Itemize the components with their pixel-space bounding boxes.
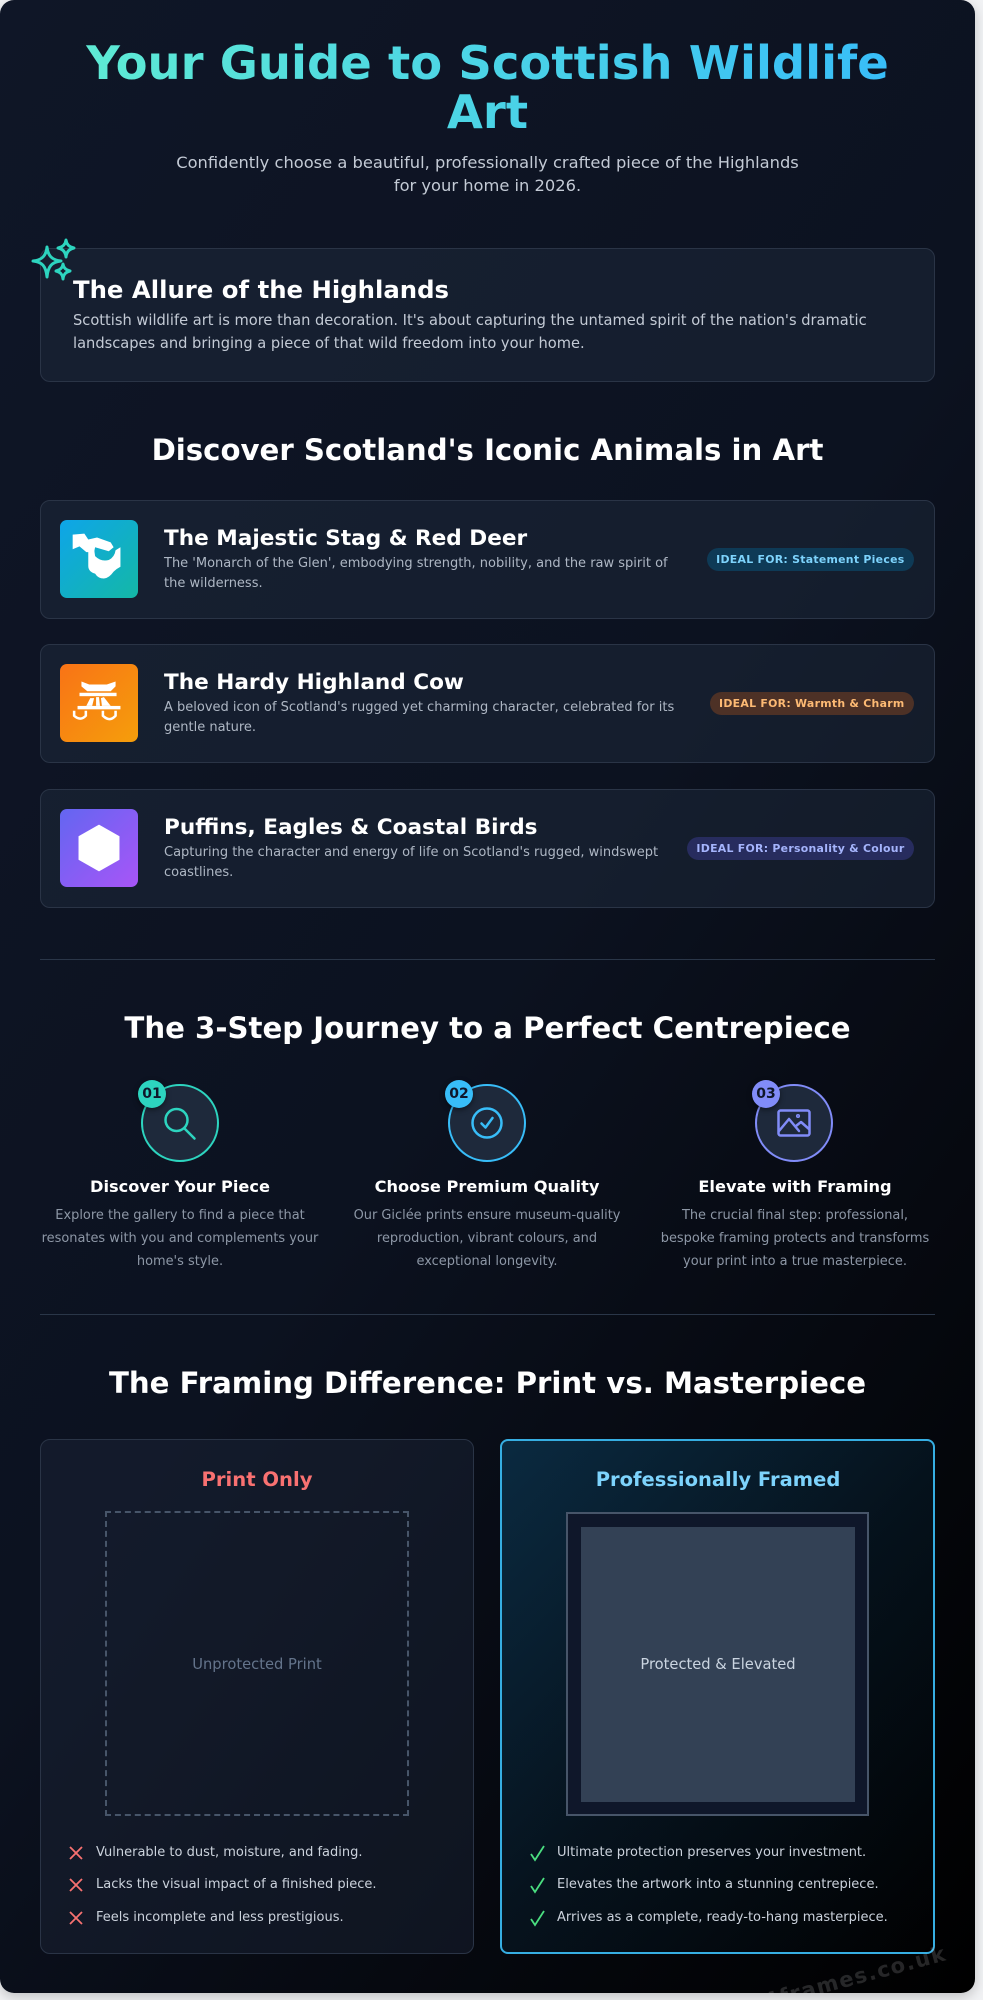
tag: personality and colour: IDEAL FOR: Personality & Colour: [696, 842, 904, 855]
section heading: three steps: The 3-Step Journey to a Perfect Centrepiece: [124, 1011, 851, 1045]
step 1 icon: [141, 1084, 219, 1162]
pro 3: Arrives as a complete, ready-to-hang masterpiece.: [557, 1910, 888, 1925]
con 3: Feels incomplete and less prestigious.: [96, 1910, 344, 1925]
step 3 badge: 03: [756, 1086, 776, 1102]
step 2 text: reproduction, vibrant colours, and: [377, 1231, 597, 1246]
pro 2: Elevates the artwork into a stunning centrepiece.: [557, 1877, 879, 1892]
panel: allure of the highlands: [40, 248, 935, 382]
check icons: [530, 1846, 545, 1926]
tag: personality and colour: [687, 837, 914, 860]
step 2 text: [354, 1208, 620, 1269]
step 1 text: resonates with you and complements your: [42, 1231, 318, 1246]
step 2 badge: 02: [449, 1086, 469, 1102]
step 3 text: The crucial final step: professional,: [682, 1208, 908, 1223]
protected artwork: [581, 1527, 855, 1802]
title: Your Guide to Scottish Wildlife: [86, 36, 889, 90]
step 3 text: your print into a true masterpiece.: [683, 1254, 907, 1269]
icon: stag: [60, 520, 138, 598]
animal description: [164, 700, 674, 735]
step 1 text: Explore the gallery to find a piece that: [55, 1208, 305, 1223]
subtitle: for your home in 2026.: [394, 176, 581, 195]
section heading: iconic animals: Discover Scotland's Iconic Animals in Art: [152, 433, 823, 467]
framed list: [530, 1845, 888, 1926]
panel: professionally framed: [500, 1439, 935, 1954]
animal title: Puffins, Eagles & Coastal Birds: [164, 815, 538, 840]
protected artwork: Protected & Elevated: [640, 1656, 796, 1673]
title: [86, 36, 889, 139]
tag: statement pieces: [707, 548, 914, 571]
animal description: The 'Monarch of the Glen', embodying strength, nobility, and the raw spirit of: [164, 556, 668, 571]
animal description: the wilderness.: [164, 576, 263, 591]
pro 1: Ultimate protection preserves your investment.: [557, 1845, 866, 1860]
step 3 text: bespoke framing protects and transforms: [661, 1231, 929, 1246]
subtitle: [176, 153, 799, 195]
step 3 icon: [755, 1084, 833, 1162]
icon: hexagon: [60, 809, 138, 887]
step 2 icon: [448, 1084, 526, 1162]
con 2: Lacks the visual impact of a finished piece.: [96, 1877, 376, 1892]
step 2 badge: [445, 1080, 473, 1108]
step 1 title: Discover Your Piece: [90, 1177, 270, 1196]
step 1 badge: [138, 1080, 166, 1108]
animal description: [164, 556, 668, 591]
body text: Scottish wildlife art is more than decoration. It's about capturing the untamed spirit of the nation's dramatic: [73, 312, 867, 329]
heading: The Allure of the Highlands: [73, 275, 449, 304]
tag: warmth and charm: [710, 692, 914, 715]
step 2 title: Choose Premium Quality: [375, 1177, 599, 1196]
step 1 badge: 01: [142, 1086, 162, 1102]
panel: highland cow card: [40, 644, 935, 763]
cross icons: [69, 1846, 83, 1925]
tag: statement pieces: IDEAL FOR: Statement Pieces: [716, 553, 904, 566]
step 3 badge: [752, 1080, 780, 1108]
step 2 text: Our Giclée prints ensure museum-quality: [354, 1208, 620, 1223]
section heading: framing difference: The Framing Difference: Print vs. Masterpiece: [109, 1366, 866, 1400]
unprotected print placeholder: Unprotected Print: [192, 1656, 322, 1673]
body text: [73, 312, 867, 352]
step 2 text: exceptional longevity.: [416, 1254, 558, 1269]
animal description: Capturing the character and energy of life on Scotland's rugged, windswept: [164, 845, 658, 860]
animal title: The Majestic Stag & Red Deer: [164, 526, 527, 551]
subtitle: Confidently choose a beautiful, professionally crafted piece of the Highlands: [176, 153, 799, 172]
panel: birds card: [40, 789, 935, 908]
framed heading: Professionally Framed: [596, 1468, 840, 1491]
step 3 text: [661, 1208, 929, 1269]
step 3 title: Elevate with Framing: [698, 1177, 892, 1196]
title: Art: [447, 85, 528, 139]
animal title: The Hardy Highland Cow: [164, 670, 464, 695]
icon: cow: [60, 664, 138, 742]
icon: sparkles: [32, 238, 76, 280]
step 1 text: home's style.: [137, 1254, 223, 1269]
animal description: [164, 845, 658, 880]
body text: landscapes and bringing a piece of that wild freedom into your home.: [73, 335, 585, 352]
print only heading: Print Only: [202, 1468, 312, 1491]
tag: warmth and charm: IDEAL FOR: Warmth & Charm: [719, 697, 904, 710]
frame: [566, 1512, 869, 1816]
unprotected print placeholder: [105, 1511, 409, 1816]
panel: stag card: [40, 500, 935, 619]
animal description: coastlines.: [164, 865, 233, 880]
step 1 text: [42, 1208, 318, 1269]
print only list: [69, 1845, 376, 1925]
animal description: gentle nature.: [164, 720, 256, 735]
panel: print only: [40, 1439, 474, 1954]
animal description: A beloved icon of Scotland's rugged yet charming character, celebrated for its: [164, 700, 674, 715]
con 1: Vulnerable to dust, moisture, and fading.: [96, 1845, 362, 1860]
